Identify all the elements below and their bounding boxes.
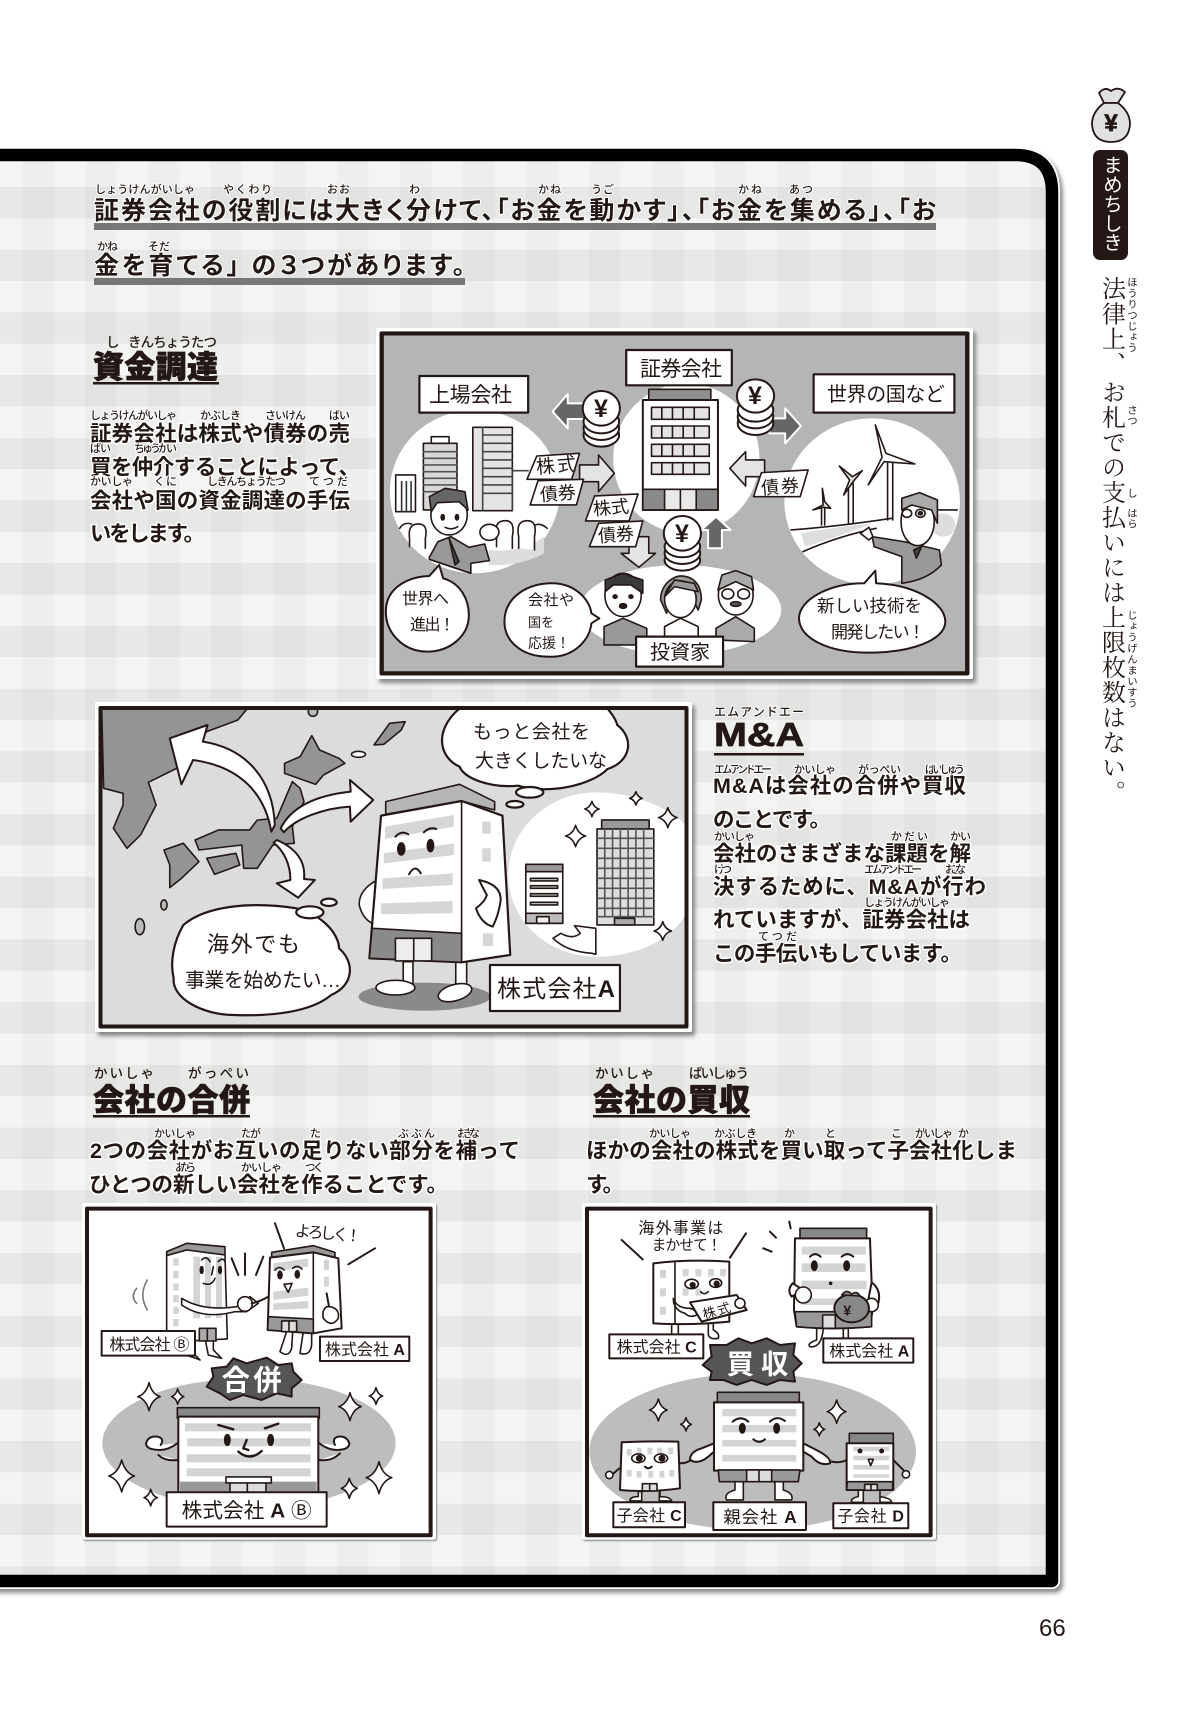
ground [801,523,872,547]
text block: 会社の買収: か [958,1127,969,1140]
labels [609,1334,913,1530]
text block: 資金調達 [90,408,360,546]
lead text: 証券会社の役割には大きく分けて、「お金を動かす」、「お金を集める」、「お [94,197,937,225]
text block: 会社の買収: と [825,1127,836,1140]
bottom building [177,1408,319,1418]
illustration text: 海外でも [207,932,300,957]
text block: 会社の買収: ほかの会社の株式を買い取って子会社化しま [586,1139,1017,1163]
sidebar ruby: ほうりつじょう [1125,277,1136,353]
sidebar ruby: はら [1125,508,1136,529]
lead text: かね [738,183,762,196]
text block: 資金調達: ちゅうかい [134,442,177,455]
text block: M&A: おこな [945,863,966,876]
center building [649,389,711,400]
text block: 会社の買収: がいしゃ [915,1126,953,1140]
text block: M&A: てつだ [758,930,797,943]
chart: 資金調達 illustration [378,330,971,677]
text block: 資金調達: てつだ [309,475,348,488]
text block: M&A: ばいしゅう [925,763,965,776]
text block: 会社の合併: たが [241,1126,261,1140]
text block: 資金調達: ばい [90,442,111,455]
illustration text: 開発したい！ [831,623,925,642]
text block: M&A: 決するために、M&Aが行わ [713,874,986,899]
frame border [382,334,968,674]
text block: M&A: のことです。 [713,808,831,832]
lead text: しょうけんがいしゃ [95,182,195,196]
heading: 資金調達: 資金調達 [93,350,218,385]
illustration text: 債券 [597,523,635,546]
text block: 資金調達: さいけん [265,409,306,422]
lead text: あつ [789,183,813,196]
text block: 会社の合併: かいしゃ [241,1161,282,1174]
white bg circle [508,792,685,957]
sidebar ruby: さつ [1125,405,1136,426]
text block: 会社の買収 [586,1126,1017,1197]
chart: 買収 illustration: 買収 [727,1348,788,1379]
text block: 資金調達: かいしゃ [90,475,133,488]
text block: M&A: がっぺい [858,762,901,776]
text block: 資金調達: 買を仲介することによって、 [90,456,360,480]
main building [358,983,491,1011]
chart: 買収 illustration [584,1205,934,1538]
person left [429,537,489,573]
heading: M&A: エムアンドエー [714,705,804,719]
lead text: そだ [148,240,170,253]
illustration text: ¥ [594,395,608,423]
text block: M&A: エムアンドエー [714,763,772,776]
text block: 資金調達: かぶしき [200,409,241,422]
child D [851,1488,892,1502]
heading: 会社の買収: かいしゃ [595,1066,654,1081]
illustration text: 会社や [528,592,574,609]
tag background [1093,150,1128,260]
chart: 買収 illustration: 子会社 C [617,1507,682,1525]
text block: 会社の合併 [89,1126,520,1197]
chart: 買収 illustration: ¥ [843,1304,852,1320]
text block: 会社の合併: つく [305,1162,324,1174]
illustration text: 投資家 [650,641,710,664]
sidebar text: first part: 法律上、 [1098,276,1124,377]
text block: 資金調達: いをします。 [90,522,205,546]
heading: 会社の買収: 会社の買収 [593,1083,750,1118]
text block: M&A: しょうけんがいしゃ [864,895,950,909]
text block: M&A: かだい [891,830,928,843]
heading: 資金調達: きんちょうたつ [128,335,217,350]
clouds [172,708,628,1015]
heading: 会社の合併: 会社の合併 [93,1083,250,1118]
chart: 買収 illustration: 株式会社 A [829,1342,910,1360]
chart: 買収 illustration: まかせて！ [652,1237,722,1254]
text block: M&A: M&Aは会社の合併や買収 [713,774,966,798]
illustration text: 上場会社 [429,384,512,407]
building A [280,1332,312,1354]
chart: 買収 illustration: 株式 [701,1300,732,1322]
coins [583,379,774,571]
illustration text [185,721,615,1003]
illustration text: 債券 [539,482,577,505]
burst [703,1338,802,1385]
illustration text [402,358,945,664]
tags [527,453,808,547]
sidebar tag: まめちしき: まめちしき [1100,155,1122,252]
illustration text: 新しい技術を [817,596,922,616]
heading: 会社の合併: かいしゃ [94,1066,154,1081]
text block: 会社の買収: す。 [586,1173,624,1197]
chart: 合併 illustration: 株式会社 A Ⓑ [182,1500,312,1523]
panel: main rounded frame [0,155,1052,1581]
chart: M&A illustration [97,704,690,1030]
illustration text: 進出！ [410,616,455,634]
text block: M&A: 会社のさまざまな課題を解 [713,841,971,866]
chart: 買収 illustration: 海外事業は [638,1219,723,1237]
illustration text: 世界へ [402,590,449,608]
lead text: やくわり [223,183,272,196]
text block: M&A: かいしゃ [714,830,755,843]
text block: M&A: けつ [714,863,732,876]
icon: money bag [1092,89,1130,142]
label [490,965,620,1011]
sidebar ruby: し [1125,488,1136,498]
text block: M&A: れていますが、証券会社は [713,907,970,932]
text block: 会社の買収: かぶしき [714,1127,757,1140]
chart: 買収 illustration: 親会社 A [723,1507,797,1527]
illustration text: 株式 [535,453,577,479]
sidebar ruby: じょうげんまいすう [1125,610,1136,709]
text block: 資金調達: くに [154,475,177,488]
chart: 買収 illustration: 子会社 D [837,1508,904,1526]
child C [630,1492,672,1501]
heading: 会社の合併: がっぺい [188,1065,249,1081]
small buildings [526,864,563,923]
illustration text: ¥ [675,520,689,548]
text block: 会社の合併: 2つの会社がお互いの足りない部分を補って [90,1138,520,1163]
chart: 合併 illustration: よろしく！ [294,1223,362,1246]
sidebar ruby [1125,277,1138,709]
heading: 会社の合併 [93,1065,250,1118]
text block: 会社の合併: ひとつの新しい会社を作ることです。 [89,1173,448,1197]
illustration text: 応援！ [528,635,570,651]
text block: M&A: この手伝いもしています。 [713,942,962,966]
illustration text: 株式会社A [497,976,615,1003]
labels [419,350,954,667]
lead text [94,182,937,285]
heading: M&A: M&A [714,716,804,753]
building B [185,1338,222,1360]
text block: 資金調達: 会社や国の資金調達の手伝 [90,489,350,513]
investors [604,618,647,645]
illustration text: もっと会社を [473,721,590,743]
illustration text: ¥ [748,382,762,410]
center [726,1482,792,1500]
heading: M&A [714,705,804,756]
building A [809,1328,848,1347]
lead text: かね [97,240,118,253]
illustration text: 世界の国など [827,383,945,406]
lead text: うご [591,182,614,196]
crowd [489,537,544,565]
text block: 資金調達: ばい [329,409,350,422]
chart: 買収 illustration: 株式会社 C [617,1339,697,1357]
illustration text: 債券 [760,475,800,499]
heading: 資金調達: し [106,335,120,350]
text block: 会社の合併: かいしゃ [154,1127,196,1140]
text block: 資金調達: しきんちょうたつ [207,475,286,488]
text block: 会社の買収: こ [891,1128,902,1140]
page number: 66 [1039,1615,1066,1642]
lead text: 金を育てる」 の３つがあります。 [94,251,465,280]
text block: 会社の買収: かいしゃ [649,1127,691,1140]
text block: M&A [713,762,986,966]
illustration text: 株式 [592,496,630,519]
building C [672,1323,719,1339]
illustration text: 国を [528,615,554,630]
lead text: かね [538,183,561,196]
burst [207,1358,302,1400]
labels [102,1331,409,1527]
text block: 資金調達: しょうけんがいしゃ [90,408,177,422]
arrows [170,725,373,898]
lead text: おお [327,183,350,196]
illustration text: 事業を始めたい… [185,969,341,992]
text block: M&A: かいしゃ [794,763,836,776]
heading: 会社の買収 [593,1066,750,1118]
text block: 会社の合併: あたら [175,1161,196,1174]
text block: 資金調達: 証券会社は株式や債券の売 [90,422,350,446]
bubbles [386,565,945,657]
heading: 資金調達 [93,335,219,385]
chart: 合併 illustration: 合併 [222,1365,282,1397]
icon: money bag: ¥ [1104,110,1118,137]
arrows [553,394,585,428]
heading: 会社の買収: ばいしゅう [689,1066,749,1081]
sidebar text: second part: お札での支払いには上限枚数はない。 [1098,380,1124,805]
text block: 会社の買収: か [784,1127,795,1140]
turbines [822,463,893,525]
text block: 会社の合併: おぎな [457,1126,480,1140]
text block: 会社の合併: ぶぶん [398,1127,435,1140]
chart: 合併 illustration [84,1205,434,1538]
person right [872,537,941,583]
chart: 合併 illustration: 株式会社 A [325,1341,405,1359]
lead text: わ [409,183,420,196]
illustration text: 証券会社 [640,358,722,381]
text block: M&A: かい [950,830,971,843]
chart: 合併 illustration: 株式会社 Ⓑ [109,1336,189,1354]
text block: M&A: エムアンドエー [864,863,922,876]
buildings left [423,443,457,510]
illustration text: 大きくしたいな [475,750,607,772]
text block: 会社の合併: た [310,1127,321,1140]
